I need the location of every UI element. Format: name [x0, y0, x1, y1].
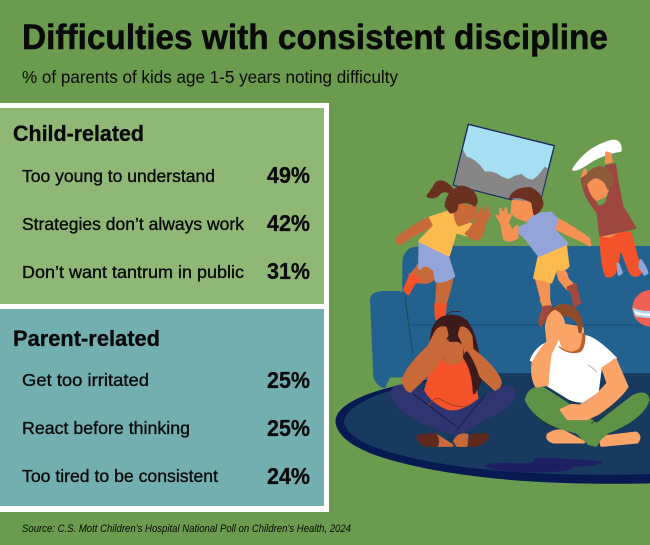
row: get too irritated: Get too irritated — [22, 370, 149, 390]
row: too young to understand: Too young to understand — [22, 166, 215, 186]
ball — [632, 290, 650, 327]
picture frame — [453, 124, 554, 207]
row: too young to understand: 49% — [267, 162, 310, 188]
row: strategies don't always work: Strategies don’t always work — [22, 214, 244, 234]
row: react before thinking: React before thinking — [22, 418, 190, 438]
parent: mother holding head — [391, 311, 514, 445]
source note: Source: C.S. Mott Children’s Hospital National Poll on Children’s Health, 2024 — [22, 523, 351, 535]
row: don't want tantrum in public — [22, 258, 310, 284]
title: Difficulties with consistent discipline — [22, 18, 608, 57]
heading: parent-related: Parent-related — [13, 326, 160, 351]
panel: white frame behind both panels — [0, 103, 329, 512]
child: boy in blue shirt — [496, 189, 590, 307]
row: get too irritated — [22, 367, 310, 393]
row: don't want tantrum in public: Don’t want tantrum in public — [22, 262, 244, 282]
row: strategies don't always work: 42% — [267, 210, 310, 236]
row: strategies don't always work — [22, 210, 310, 236]
row: too tired to be consistent: 24% — [267, 463, 310, 489]
row: react before thinking: 25% — [267, 415, 310, 441]
row: too tired to be consistent — [22, 463, 310, 489]
child: girl in yellow shirt — [397, 182, 491, 318]
row: too young to understand — [22, 162, 310, 188]
row: react before thinking — [22, 415, 310, 441]
panel: child-related — [0, 108, 324, 304]
sofa — [402, 246, 650, 397]
illustration: family scene — [336, 124, 650, 484]
rug — [336, 291, 650, 484]
row: don't want tantrum in public: 31% — [267, 258, 310, 284]
row: too tired to be consistent: Too tired to be consistent — [22, 466, 218, 486]
parent: father with hand on forehead — [526, 300, 648, 445]
panel: parent-related — [0, 309, 324, 506]
child: girl with pillow — [574, 141, 647, 276]
heading: child-related: Child-related — [13, 121, 144, 146]
row: get too irritated: 25% — [267, 367, 310, 393]
subtitle: % of parents of kids age 1-5 years noting difficulty — [22, 67, 398, 87]
